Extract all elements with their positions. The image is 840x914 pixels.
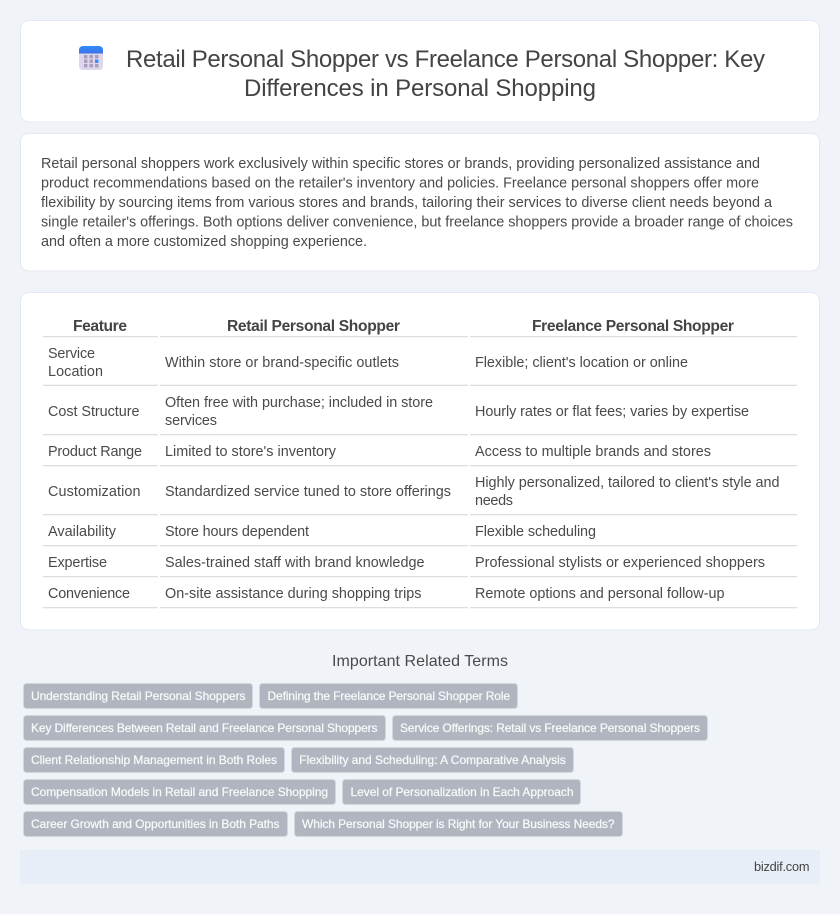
- row: availability: [43, 524, 797, 546]
- panel: intro text: flexibility by sourcing items from various stores and brands, tailoring their services to diverse client needs beyond a: [41, 195, 772, 211]
- row: convenience: On-site assistance during shopping trips: [165, 586, 422, 602]
- row: customization: [43, 475, 797, 515]
- tag: Service Offerings: Retail vs Freelance Personal Shoppers: [400, 721, 700, 735]
- panel: intro text: and often a more customized shopping experience.: [41, 234, 367, 250]
- row: cost structure: services: [165, 413, 217, 429]
- row: availability: Flexible scheduling: [475, 524, 596, 540]
- row: expertise: Professional stylists or experienced shoppers: [475, 555, 765, 571]
- row: convenience: Convenience: [48, 586, 130, 602]
- tag: Level of Personalization in Each Approach: [350, 785, 574, 799]
- table header row: Freelance Personal Shopper: [532, 318, 734, 335]
- row: availability: Store hours dependent: [165, 524, 309, 540]
- row: customization: Standardized service tuned to store offerings: [165, 484, 451, 500]
- row: product range: Access to multiple brands and stores: [475, 444, 711, 460]
- tag: [292, 748, 574, 772]
- tag: Flexibility and Scheduling: A Comparative Analysis: [299, 753, 566, 767]
- row: cost structure: Cost Structure: [48, 404, 140, 420]
- row: expertise: Sales-trained staff with brand knowledge: [165, 555, 424, 571]
- row: expertise: Expertise: [48, 555, 107, 571]
- panel: intro text: single retailer's offerings. Both options deliver convenience, but freelance shoppers provide a broader range of choices: [41, 214, 793, 230]
- row: convenience: Remote options and personal follow-up: [475, 586, 724, 602]
- tag: [24, 684, 252, 708]
- footer: [20, 850, 820, 884]
- tag: [342, 780, 580, 804]
- footer: bizdif.com: [754, 859, 810, 874]
- icon: calendar: [79, 46, 103, 70]
- related terms tags: [24, 684, 708, 836]
- row: service location: Within store or brand-specific outlets: [165, 355, 399, 371]
- tag: Which Personal Shopper is Right for Your Business Needs?: [302, 817, 615, 831]
- tag: [294, 812, 622, 836]
- row: product range: Limited to store's inventory: [165, 444, 337, 460]
- panel: intro text: product recommendations based on the retailer's inventory and policies. Freelance personal shoppers offer more: [41, 176, 759, 192]
- row: cost structure: Hourly rates or flat fees; varies by expertise: [475, 404, 749, 420]
- tag: [24, 748, 284, 772]
- panel: intro text: [20, 134, 820, 271]
- panel: comparison table: [20, 292, 820, 630]
- table header row: Retail Personal Shopper: [227, 318, 400, 335]
- tag: [392, 716, 708, 740]
- table header row: [43, 318, 797, 337]
- row: customization: Customization: [48, 484, 140, 500]
- tag: [260, 684, 518, 708]
- row: service location: [43, 346, 797, 386]
- row: convenience: [43, 586, 797, 608]
- row: customization: Highly personalized, tailored to client's style and: [475, 475, 780, 491]
- tag: Compensation Models in Retail and Freelance Shopping: [31, 785, 328, 799]
- panel: intro text: Retail personal shoppers work exclusively within specific stores or brands, providing personalized assistance and: [41, 156, 760, 172]
- row: cost structure: Often free with purchase; included in store: [165, 395, 433, 411]
- table header row: Feature: [73, 318, 127, 335]
- tag: Client Relationship Management in Both Roles: [31, 753, 277, 767]
- tag: [24, 780, 336, 804]
- tag: Career Growth and Opportunities in Both Paths: [31, 817, 280, 831]
- panel: header: [20, 20, 820, 122]
- title: Differences in Personal Shopping: [244, 75, 596, 102]
- title: [126, 46, 765, 102]
- row: service location: Service: [48, 346, 95, 362]
- row: service location: Flexible; client's location or online: [475, 355, 688, 371]
- row: expertise: [43, 555, 797, 577]
- tag: [24, 812, 288, 836]
- tag: Understanding Retail Personal Shoppers: [31, 689, 246, 703]
- heading: important related terms: Important Related Terms: [332, 653, 508, 670]
- row: cost structure: [43, 395, 797, 435]
- row: availability: Availability: [48, 524, 117, 540]
- title: Retail Personal Shopper vs Freelance Personal Shopper: Key: [126, 46, 765, 73]
- tag: Defining the Freelance Personal Shopper Role: [268, 689, 510, 703]
- row: customization: needs: [475, 493, 513, 509]
- row: service location: Location: [48, 364, 103, 380]
- tag: Key Differences Between Retail and Freelance Personal Shoppers: [31, 721, 378, 735]
- row: product range: [43, 444, 797, 466]
- tag: [24, 716, 386, 740]
- row: product range: Product Range: [48, 444, 142, 460]
